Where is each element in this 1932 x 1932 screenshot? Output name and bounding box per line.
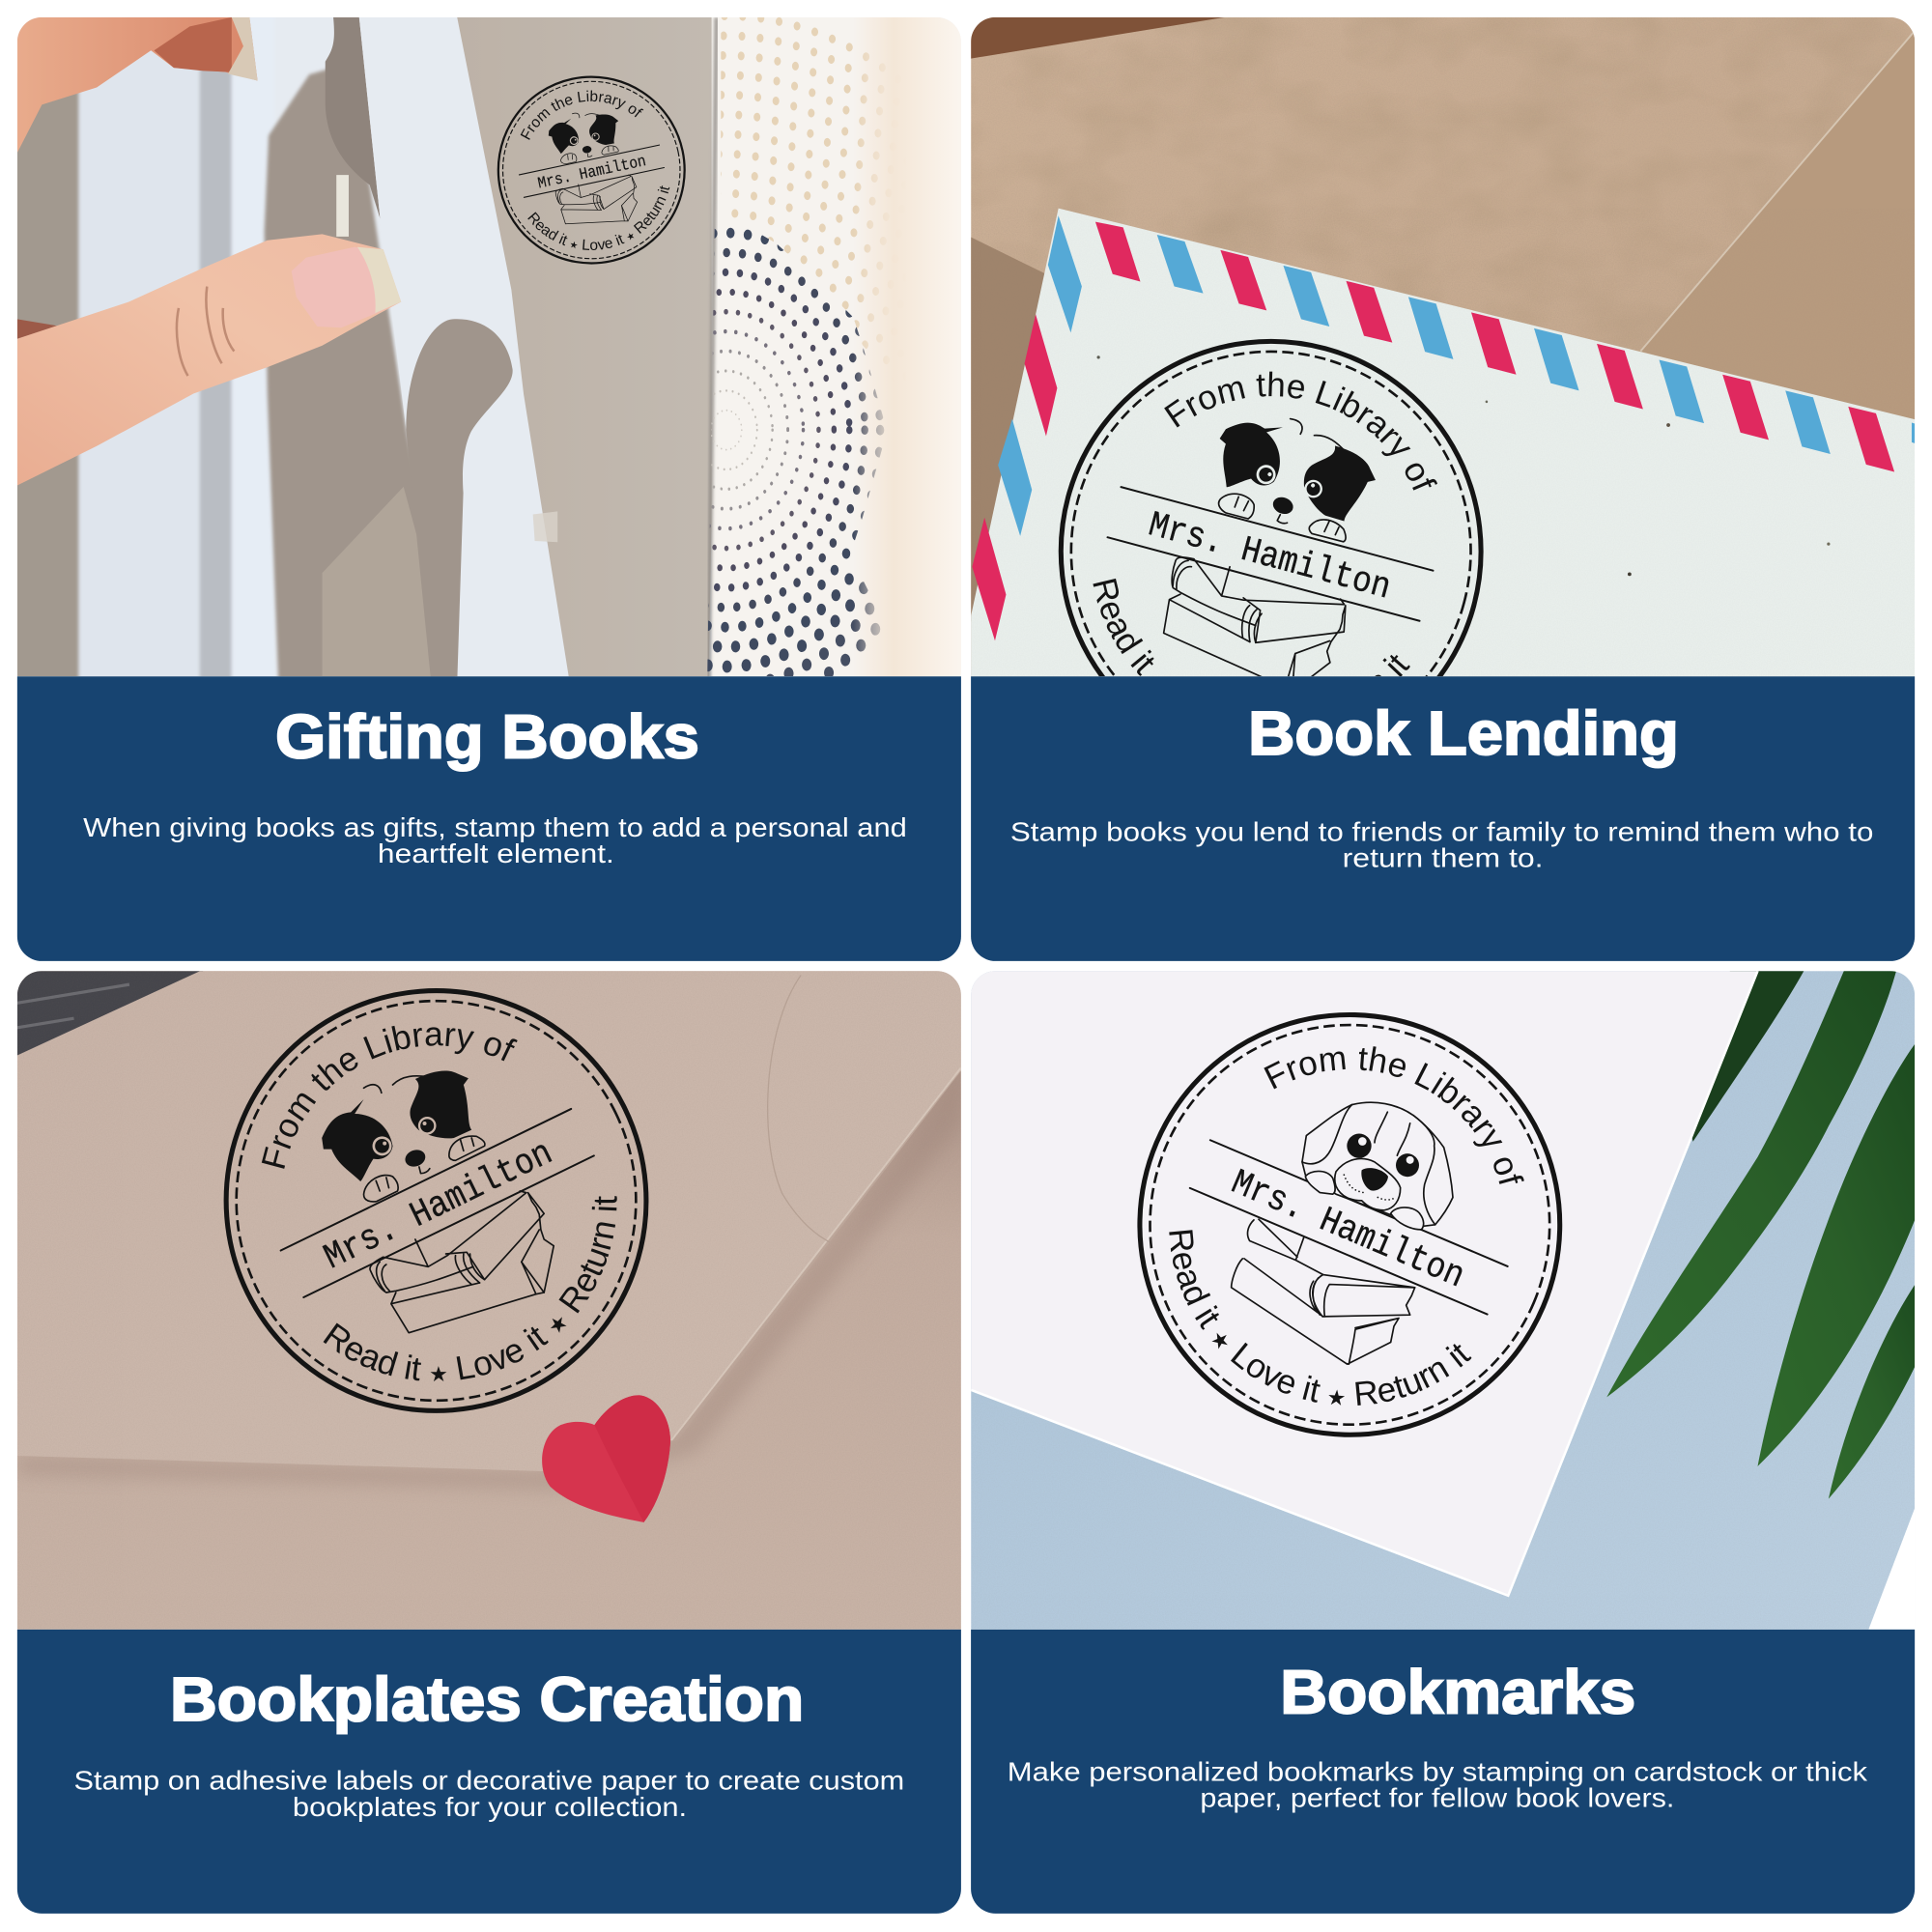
heading: Gifting Books [275, 701, 699, 771]
photo: airmail card on kraft envelope [971, 17, 1915, 676]
caption bar [17, 1630, 961, 1914]
body text: heartfelt element. [378, 838, 614, 868]
body text: paper, perfect for fellow book lovers. [1200, 1783, 1674, 1813]
panel: Bookplates Creation [17, 971, 961, 1914]
caption bar [17, 676, 961, 961]
body text [1010, 817, 1873, 872]
body text: Make personalized bookmarks by stamping on cardstock or thick [1008, 1757, 1868, 1787]
airmail border stripes [972, 215, 1918, 640]
stamp impression: beagle seal: From the Library of [1264, 1046, 1524, 1184]
body text: bookplates for your collection. [293, 1792, 687, 1822]
stamp impression: puppy seal: From the Library of [1164, 371, 1437, 491]
stamp impression: small puppy seal: Mrs. Hamilton [536, 152, 648, 192]
white card [971, 971, 1758, 1596]
stamp impression: puppy seal: Read it ★ Love it ★ Return it [1093, 578, 1410, 676]
body text: When giving books as gifts, stamp them to add a personal and [83, 812, 907, 842]
envelope flap [17, 971, 961, 1471]
panel: Gifting Books [17, 17, 961, 961]
panel: Bookmarks [971, 950, 1918, 1914]
icon: leaves [1606, 971, 1918, 1499]
stamp impression: puppy seal [1059, 338, 1484, 676]
stamp impression: puppy seal [224, 988, 649, 1413]
heading: Bookplates Creation [170, 1664, 804, 1734]
stamp impression: puppy seal: From the Library of [261, 1026, 518, 1169]
stamp impression: puppy seal: Mrs. Hamilton [318, 1133, 559, 1279]
photo: hand peeling paper with stamp [17, 17, 961, 676]
photo: white card on blue plaster with leaves [971, 950, 1918, 1631]
panel: Book Lending [971, 17, 1915, 961]
heading: Bookmarks [1280, 1658, 1635, 1727]
stamp impression: beagle seal [1074, 950, 1625, 1500]
stamp impression: beagle seal: Mrs. Hamilton [1225, 1163, 1470, 1297]
stamp impression: puppy seal: Read it ★ Love it ★ Return it [323, 1196, 617, 1381]
body text: Stamp books you lend to friends or family to remind them who to [1010, 817, 1873, 847]
body text: Stamp on adhesive labels or decorative paper to create custom [74, 1766, 904, 1796]
icon: pointing finger [17, 234, 401, 486]
caption bar [971, 676, 1915, 961]
caption bar [971, 1630, 1915, 1914]
paper shadows [265, 17, 457, 684]
heading: Book Lending [1248, 698, 1679, 768]
stamp impression: small puppy seal [497, 75, 686, 265]
stamp impression: small puppy seal: Read it ★ Love it ★ Return it [527, 185, 670, 250]
body text [74, 1766, 904, 1822]
body text: return them to. [1343, 842, 1544, 872]
icon: red heart [542, 1395, 670, 1522]
stamp impression: puppy seal: Mrs. Hamilton [1144, 505, 1395, 610]
body text [83, 812, 907, 868]
icon: upper fingertip [17, 17, 258, 153]
airmail card [966, 209, 1918, 676]
body text [1008, 1757, 1868, 1813]
photo: kraft envelope with red heart [17, 971, 961, 1630]
stamp impression: small puppy seal: From the Library of [520, 91, 643, 140]
stamp impression: beagle seal: Read it ★ Love it ★ Return it [1169, 1230, 1472, 1406]
dotted sheet [711, 17, 870, 676]
icon: halftone dot rings [707, 17, 888, 676]
icon: leaf behind card [1681, 971, 1804, 1142]
